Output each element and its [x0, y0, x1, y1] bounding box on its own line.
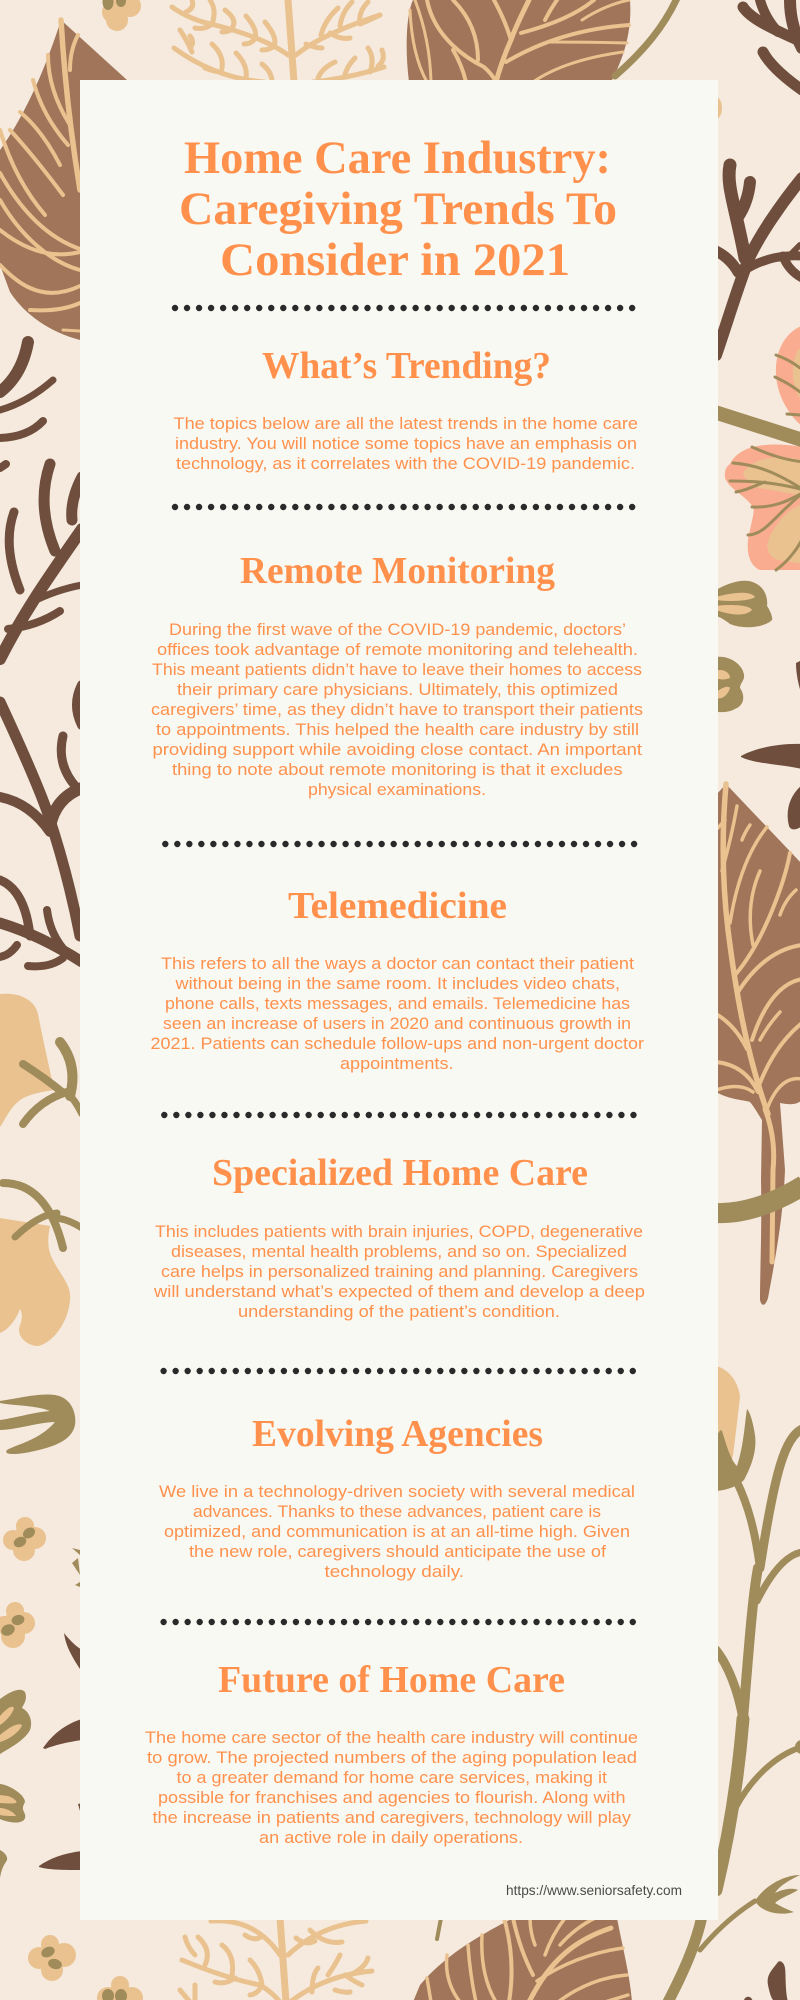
- text block: remote monitoring: thing to note about remote monitoring is that it excludes: [172, 760, 622, 779]
- olive leaf: left: [0, 1395, 75, 1454]
- text block: evolving agencies: advances. Thanks to these advances, patient care is: [193, 1502, 601, 1521]
- seed pods: right: [716, 581, 772, 712]
- text block: future of home care: to grow. The projected numbers of the aging population lead: [147, 1748, 637, 1767]
- text block: remote monitoring: This meant patients didn’t have to leave their homes to access: [152, 660, 642, 679]
- heading: Remote Monitoring: Remote Monitoring: [240, 550, 555, 592]
- vines: right lower: [668, 1409, 800, 2000]
- text block: remote monitoring: providing support while avoiding close contact. An important: [152, 740, 642, 759]
- divider 3: [165, 841, 635, 847]
- heading: Evolving Agencies: Evolving Agencies: [252, 1413, 543, 1455]
- text block: evolving agencies: We live in a technology-driven society with several medical: [159, 1482, 635, 1501]
- text block: remote monitoring: offices took advantage of remote monitoring and telehealth.: [157, 640, 638, 659]
- text block: future of home care: possible for franchises and agencies to flourish. Along with: [158, 1788, 626, 1807]
- olive sprigs: left: [3, 1042, 82, 1248]
- title: [179, 132, 617, 286]
- tan seed: right edge: [710, 97, 722, 119]
- text block: intro: technology, as it correlates with the COVID-19 pandemic.: [176, 454, 635, 473]
- coral: left upper: [0, 342, 82, 659]
- text block: remote monitoring: their primary care physicians. Ultimately, this optimized: [177, 680, 618, 699]
- text block: specialized home care: care helps in personalized training and planning. Caregivers: [161, 1262, 638, 1281]
- divider 6: [164, 1619, 633, 1625]
- thorn: bottom: [437, 1918, 441, 1939]
- text block: telemedicine: seen an increase of users in 2020 and continuous growth in: [163, 1014, 631, 1033]
- coral: top right: [743, 0, 800, 90]
- plant: top centre: [172, 0, 384, 82]
- pink flowers: right: [725, 325, 800, 570]
- coral: right upper: [716, 165, 800, 355]
- brown leaflets: right: [741, 660, 800, 829]
- divider 1: [175, 305, 633, 311]
- text block: remote monitoring: physical examinations.: [308, 780, 486, 799]
- text block: future of home care: [145, 1728, 638, 1847]
- text block: evolving agencies: [159, 1482, 635, 1581]
- divider 4: [164, 1112, 634, 1118]
- text block: future of home care: the increase in patients and caregivers, technology will play: [152, 1808, 632, 1827]
- text block: specialized home care: [153, 1222, 645, 1321]
- text block: specialized home care: understanding of the patient’s condition.: [238, 1302, 560, 1321]
- heading: Telemedicine: Telemedicine: [288, 885, 507, 927]
- text block: telemedicine: appointments.: [340, 1054, 454, 1073]
- text block: evolving agencies: technology daily.: [324, 1562, 464, 1581]
- text block: evolving agencies: optimized, and communication is at an all-time high. Given: [164, 1522, 630, 1541]
- heading: Future of Home Care: Future of Home Care: [218, 1659, 565, 1701]
- title: Caregiving Trends To: [179, 183, 617, 235]
- text block: intro: [174, 414, 638, 473]
- sprout: bottom right: [744, 1961, 788, 2000]
- divider 2: [175, 504, 633, 510]
- text block: future of home care: to a greater demand for home care services, making it: [176, 1768, 607, 1787]
- text block: specialized home care: diseases, mental health problems, and so on. Specialized: [171, 1242, 627, 1261]
- text block: future of home care: The home care sector of the health care industry will continue: [145, 1728, 638, 1747]
- tan blob: right: [716, 1366, 740, 1478]
- title: Home Care Industry:: [184, 132, 611, 184]
- vine: top: [615, 0, 678, 76]
- text block: specialized home care: will understand what’s expected of them and develop a deep: [153, 1282, 645, 1301]
- panel: main content card: [80, 80, 718, 1920]
- seed pods: left: [0, 1548, 80, 1878]
- olive band: right: [716, 1185, 800, 1213]
- flower: top: [102, 0, 141, 31]
- text block: evolving agencies: the new role, caregivers should anticipate the use of: [189, 1542, 606, 1561]
- brown leaflets: left: [39, 1633, 82, 1870]
- text block: telemedicine: This refers to all the ways a doctor can contact their patient: [161, 954, 634, 973]
- heading: Specialized Home Care: Specialized Home Care: [212, 1152, 588, 1194]
- leaf: right: [716, 784, 800, 1305]
- flowers: left: [0, 1517, 76, 1981]
- leaf: top centre: [407, 0, 630, 82]
- leaf: bottom centre: [413, 1918, 632, 2000]
- olive stem: right: [716, 405, 800, 448]
- text block: telemedicine: without being in the same room. It includes video chats,: [174, 974, 620, 993]
- text block: remote monitoring: caregivers’ time, as they didn’t have to transport their patients: [151, 700, 643, 719]
- text block: remote monitoring: to appointments. This helped the health care industry by still: [156, 720, 639, 739]
- text block: telemedicine: 2021. Patients can schedule follow-ups and non-urgent doctor: [150, 1034, 644, 1053]
- coral: left lower: [0, 685, 82, 966]
- text block: telemedicine: phone calls, texts messages, and emails. Telemedicine has: [165, 994, 630, 1013]
- text block: specialized home care: This includes patients with brain injuries, COPD, degenerative: [155, 1222, 643, 1241]
- text block: telemedicine: [150, 954, 644, 1073]
- title: Consider in 2021: [220, 234, 570, 286]
- flower: bottom: [97, 1976, 143, 2000]
- leaf: top left: [0, 20, 127, 340]
- text block: remote monitoring: During the first wave of the COVID-19 pandemic, doctors’: [169, 620, 626, 639]
- heading: What's Trending?: What’s Trending?: [262, 345, 551, 387]
- divider 5: [164, 1368, 633, 1374]
- plant: bottom centre: [180, 1918, 372, 2000]
- text block: remote monitoring: [151, 620, 643, 799]
- text block: intro: industry. You will notice some topics have an emphasis on: [175, 434, 637, 453]
- text block: intro: The topics below are all the latest trends in the home care: [174, 414, 638, 433]
- tan blobs: left: [0, 994, 70, 1346]
- text block: future of home care: an active role in daily operations.: [259, 1828, 523, 1847]
- source url: https://www.seniorsafety.com: [506, 1882, 682, 1898]
